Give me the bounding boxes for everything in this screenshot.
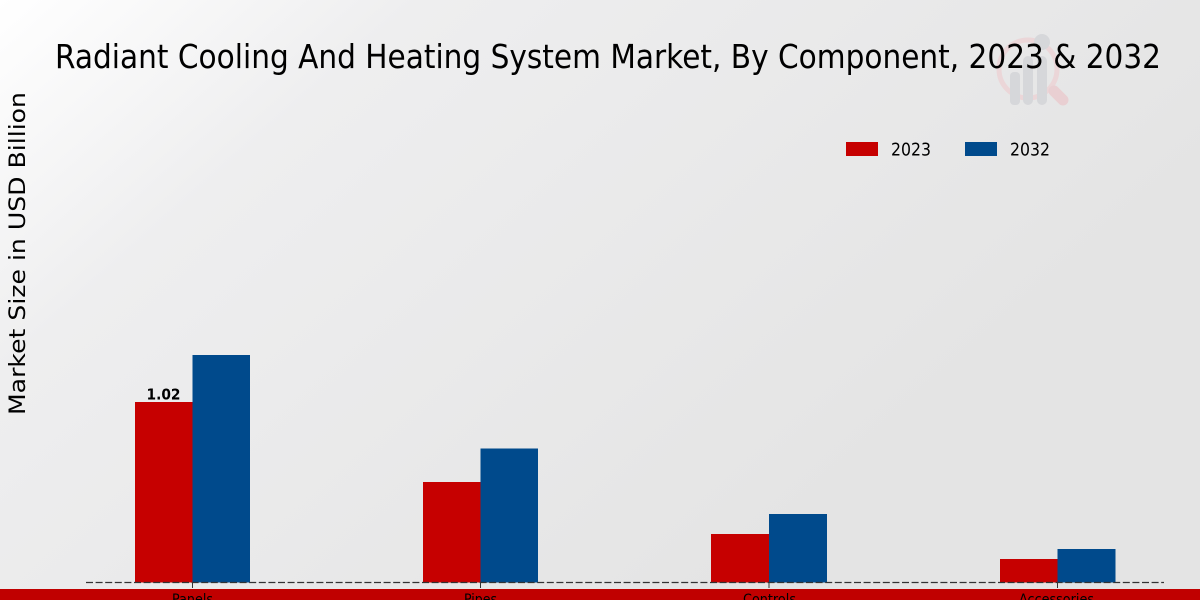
legend item: 2032: 2032 bbox=[1010, 140, 1050, 160]
bars: Controls bbox=[711, 514, 827, 582]
y-axis label: Market Size in USD Billion bbox=[5, 92, 31, 415]
bars: Accessories bbox=[1000, 549, 1116, 582]
footer band bbox=[0, 589, 1200, 600]
legend bbox=[846, 140, 1050, 160]
icon: watermark magnifier logo bbox=[999, 34, 1063, 105]
legend item: 2032 bbox=[965, 140, 1050, 160]
data label: 1.02: 1.02 bbox=[146, 386, 180, 404]
bars: Pipes bbox=[423, 448, 538, 582]
legend item: 2023: 2023 bbox=[891, 140, 931, 160]
bars: Panels bbox=[135, 355, 250, 582]
legend item: 2023 bbox=[846, 140, 931, 160]
x-axis category labels bbox=[172, 592, 1094, 600]
